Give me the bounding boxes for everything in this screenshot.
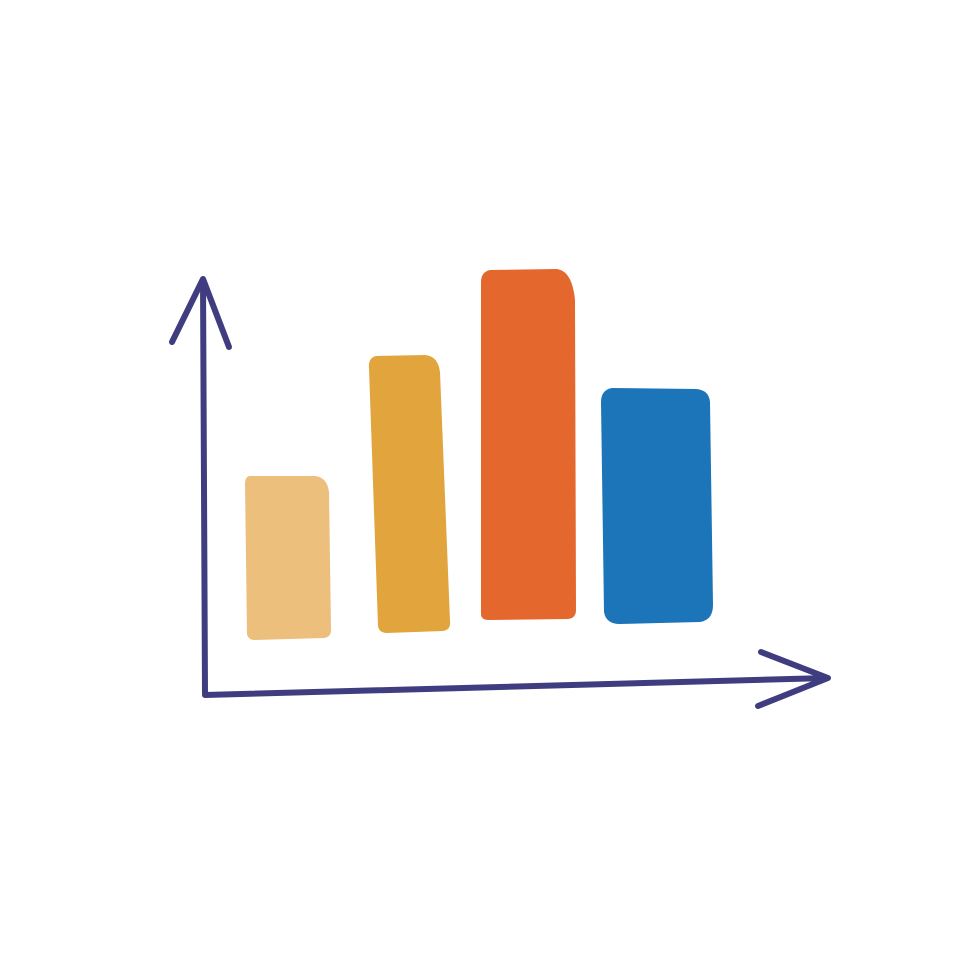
bar 3: orange xyxy=(481,269,576,620)
bar 4: blue xyxy=(601,388,713,624)
y axis arrow xyxy=(172,279,229,694)
bar 2: amber xyxy=(369,355,450,633)
bar 1: light tan xyxy=(245,476,331,640)
x axis arrow xyxy=(205,652,828,706)
